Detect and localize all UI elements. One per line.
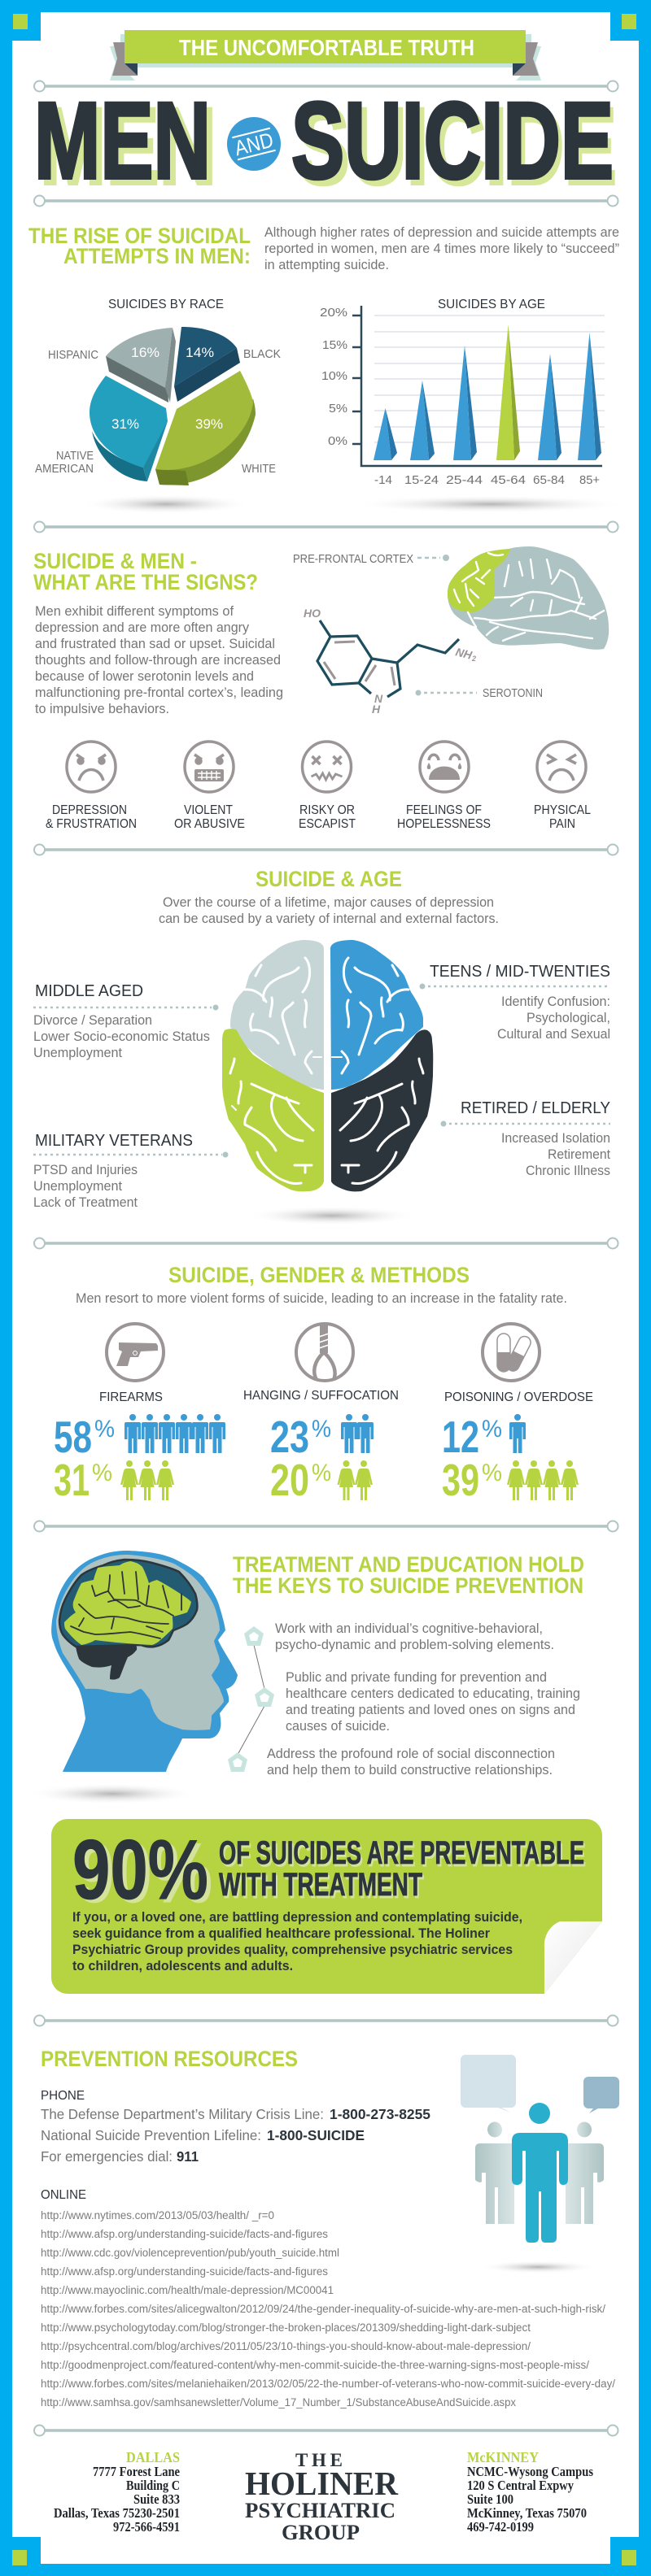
bar chart: suicides by age: 5% <box>329 402 347 416</box>
address: dallas: 7777 Forest Lane <box>93 2464 180 2479</box>
heading: suicide and age: can be caused by a variety of internal and external factors. <box>159 912 499 926</box>
heading: prevention resources: PREVENTION RESOURCES <box>41 2047 298 2071</box>
speech bubble right <box>583 2077 619 2113</box>
person left <box>475 2122 514 2224</box>
online source list: http://psychcentral.com/blog/archives/2011/05/23/10-things-you-should-know-about-male-depression/ <box>41 2340 531 2352</box>
heading: suicide and men signs: WHAT ARE THE SIGNS? <box>33 570 258 594</box>
label: military veterans: Lack of Treatment <box>33 1195 138 1210</box>
panel: firearms: 31 <box>54 1455 90 1505</box>
panel: hanging: HANGING / SUFFOCATION <box>243 1389 399 1403</box>
icon: feelings of hopelessness <box>420 742 469 792</box>
panel: hanging: 20 <box>270 1455 309 1505</box>
phone list: 1-800-SUICIDE <box>267 2127 365 2143</box>
panel: hanging <box>243 1324 399 1505</box>
icon: pills <box>483 1324 540 1381</box>
heading: the rise of suicidal attempts: THE RISE OF SUICIDAL <box>28 224 251 248</box>
bar chart: suicides by age: 25-44 <box>446 474 483 487</box>
symptom labels: DEPRESSION <box>52 803 127 817</box>
speech bubble left <box>461 2055 516 2113</box>
online source list: http://www.afsp.org/understanding-suicide/facts-and-figures <box>41 2228 328 2240</box>
bar chart: suicides by age: 10% <box>321 370 347 383</box>
signs paragraph: thoughts and follow-through are increased <box>35 653 281 668</box>
callout: 90 percent preventable: Psychiatric Group provides quality, comprehensive psychiatric services <box>72 1943 513 1957</box>
phone list: The Defense Department’s Military Crisis Line: <box>41 2106 324 2122</box>
symptom labels: ESCAPIST <box>299 817 356 831</box>
label: teens mid-twenties: TEENS / MID-TWENTIES <box>430 963 610 981</box>
label: teens mid-twenties: Cultural and Sexual <box>497 1027 610 1042</box>
treatment text: psycho-dynamic and problem-solving elements. <box>275 1638 554 1652</box>
callout: 90 percent preventable: 90% <box>76 1826 212 1921</box>
address: dallas: Building C <box>126 2478 180 2493</box>
molecule: serotonin: NH <box>454 645 474 662</box>
label: middle aged: Divorce / Separation <box>33 1013 152 1028</box>
logo: the holiner psychiatric group <box>245 2450 398 2544</box>
symptom labels: PHYSICAL <box>534 803 591 817</box>
symptom labels: HOPELESSNESS <box>397 817 491 831</box>
panel: firearms <box>54 1324 225 1505</box>
intro text: reported in women, men are 4 times more likely to “succeed” <box>264 242 619 256</box>
online source list: http://www.mayoclinic.com/health/male-depression/MC00041 <box>41 2284 334 2296</box>
panel: poisoning: 39 <box>442 1455 479 1505</box>
panel: firearms: FIREARMS <box>99 1390 163 1404</box>
signs paragraph: to impulsive behaviors. <box>35 702 169 716</box>
label: retired elderly: Retirement <box>548 1147 610 1162</box>
illustration: head with brain <box>27 1551 238 1804</box>
pie chart: suicides by race: NATIVE <box>56 450 94 463</box>
icon: risky or escapist <box>303 742 352 792</box>
heading: suicide, gender and methods: SUICIDE, GENDER & METHODS <box>168 1263 470 1287</box>
heading: suicide and age <box>159 867 499 926</box>
logo: the holiner psychiatric group: GROUP <box>282 2521 360 2544</box>
brain: cortex front <box>64 1561 191 1645</box>
online source list: http://www.nytimes.com/2013/05/03/health/ _r=0 <box>41 2209 274 2221</box>
phone list: National Suicide Prevention Lifeline: <box>41 2127 261 2143</box>
bar chart: suicides by age: 20% <box>320 307 347 320</box>
label: retired elderly: Increased Isolation <box>501 1131 610 1146</box>
callout: pre-frontal cortex: PRE-FRONTAL CORTEX <box>293 553 413 566</box>
bar chart: suicides by age: 85+ <box>579 474 600 487</box>
label: military veterans: PTSD and Injuries <box>33 1163 138 1177</box>
brain: top view quadrants <box>222 940 433 1225</box>
heading: the rise of suicidal attempts <box>28 224 251 268</box>
pie chart: suicides by race: 31% <box>111 416 139 432</box>
phone list: For emergencies dial: <box>41 2148 173 2165</box>
phone list: 911 <box>177 2148 199 2165</box>
callout: serotonin <box>415 687 543 700</box>
person right <box>566 2122 604 2224</box>
label: middle aged <box>33 982 218 1060</box>
online source list: http://www.samhsa.gov/samhsanewsletter/Volume_17_Number_1/SubstanceAbuseAndSuicide.aspx <box>41 2396 516 2408</box>
phone list <box>41 2089 430 2165</box>
signs paragraph <box>35 604 283 716</box>
heading: treatment and education: THE KEYS TO SUICIDE PREVENTION <box>233 1573 583 1598</box>
callout: 90 percent preventable: seek guidance from a qualified healthcare professional. The Holiner <box>72 1926 491 1941</box>
quadrant: middle aged <box>230 940 324 1090</box>
label: middle aged: MIDDLE AGED <box>35 982 143 1000</box>
panel: poisoning: 12 <box>442 1412 479 1462</box>
banner: the uncomfortable truth <box>110 30 541 80</box>
label: middle aged: Unemployment <box>33 1046 122 1060</box>
treatment text: Public and private funding for prevention and <box>286 1670 547 1685</box>
heading: suicide and men signs <box>33 549 258 594</box>
panel: poisoning: POISONING / OVERDOSE <box>444 1390 593 1404</box>
panel: firearms: % <box>92 1460 112 1486</box>
panel: poisoning <box>442 1324 593 1505</box>
bar chart: suicides by age: -14 <box>374 474 392 487</box>
heading: the rise of suicidal attempts: ATTEMPTS IN MEN: <box>63 244 251 268</box>
icon row: symptoms <box>46 742 591 831</box>
label: military veterans: Unemployment <box>33 1179 122 1194</box>
symptom labels: FEELINGS OF <box>406 803 482 817</box>
symptom labels: & FRUSTRATION <box>46 817 137 831</box>
person center <box>512 2103 568 2243</box>
symptom labels <box>46 803 591 831</box>
heading: treatment and education <box>233 1552 584 1598</box>
online source list: http://www.forbes.com/sites/melaniehaiken/2013/02/05/22-the-number-of-veterans-who-now-commit-suicide-every-day/ <box>41 2378 615 2390</box>
icon: noose <box>296 1324 353 1381</box>
logo: the holiner psychiatric group: THE <box>295 2450 343 2470</box>
label: teens mid-twenties: Identify Confusion: <box>501 994 610 1009</box>
online source list: http://goodmenproject.com/featured-content/why-men-commit-suicide-the-three-warning-signs-most-people-miss/ <box>41 2359 589 2371</box>
pie chart: suicides by race: 14% <box>186 345 214 360</box>
bar chart: suicides by age: 15-24 <box>404 474 439 487</box>
banner: the uncomfortable truth: THE UNCOMFORTABLE TRUTH <box>179 35 474 60</box>
address: mckinney: 120 S Central Expwy <box>467 2478 574 2493</box>
title: men and suicide: MEN <box>40 86 216 207</box>
address: dallas: Dallas, Texas 75230-2501 <box>54 2505 180 2521</box>
molecule: serotonin: 2 <box>471 655 476 663</box>
icon: violent or abusive <box>185 742 234 792</box>
bar chart: suicides by age: 15% <box>322 339 347 352</box>
callout: serotonin: SEROTONIN <box>483 687 543 700</box>
address: mckinney <box>467 2449 593 2535</box>
icon: depression and frustration <box>67 742 116 792</box>
label: retired elderly: Chronic Illness <box>526 1164 610 1178</box>
panel: hanging: % <box>312 1460 331 1486</box>
badge: and <box>227 117 281 171</box>
address: dallas: DALLAS <box>126 2449 180 2465</box>
label: military veterans: MILITARY VETERANS <box>35 1132 193 1150</box>
online source list: http://www.cdc.gov/violenceprevention/pub/youth_suicide.html <box>41 2247 339 2259</box>
quadrant: military veterans <box>222 1029 324 1191</box>
label: middle aged: Lower Socio-economic Status <box>33 1029 210 1044</box>
quadrant: retired <box>331 1029 433 1191</box>
heading: suicide, gender and methods: Men resort to more violent forms of suicide, leading to an increase in the fatality rate. <box>76 1291 567 1306</box>
brain: cortex back <box>59 1560 197 1647</box>
address: dallas: Suite 833 <box>133 2491 180 2507</box>
icon: people talking <box>461 2055 619 2274</box>
symptom labels: PAIN <box>549 817 575 831</box>
address: mckinney: NCMC-Wysong Campus <box>467 2464 593 2479</box>
bar chart: suicides by age <box>320 298 628 513</box>
online source list: http://www.afsp.org/understanding-suicide/facts-and-figures <box>41 2265 328 2278</box>
pie chart: suicides by race: 39% <box>195 416 223 432</box>
panel: hanging: % <box>312 1416 331 1442</box>
logo: the holiner psychiatric group: PSYCHIATRIC <box>245 2499 395 2522</box>
address: dallas: 972-566-4591 <box>113 2519 180 2535</box>
address: mckinney: 469-742-0199 <box>467 2519 534 2535</box>
treatment text: causes of suicide. <box>286 1719 390 1734</box>
title: men and suicide: MEN <box>34 80 211 202</box>
icon: physical pain <box>537 742 586 792</box>
label: military veterans <box>33 1132 228 1210</box>
panel: firearms: % <box>94 1416 115 1442</box>
badge: and: AND <box>232 128 276 160</box>
panel: poisoning: % <box>482 1460 502 1486</box>
online source list: http://www.forbes.com/sites/alicegwalton/2012/09/24/the-gender-inequality-of-suicide-why-are-men-at-such-high-risk/ <box>41 2303 605 2315</box>
molecule: serotonin: H <box>372 703 381 716</box>
bar chart: suicides by age: 45-64 <box>491 474 526 487</box>
pie chart: suicides by race: BLACK <box>243 348 281 361</box>
label: retired elderly <box>441 1099 610 1178</box>
treatment text: Address the profound role of social disconnection <box>267 1747 555 1761</box>
intro text: Although higher rates of depression and suicide attempts are <box>264 225 619 240</box>
signs paragraph: depression and are more often angry <box>35 620 250 635</box>
heading: suicide and age: Over the course of a lifetime, major causes of depression <box>163 895 494 910</box>
brain: cerebellum <box>76 1645 137 1680</box>
logo: the holiner psychiatric group: HOLINER <box>245 2465 398 2502</box>
treatment text: Work with an individual’s cognitive-behavioral, <box>275 1621 543 1636</box>
panel: poisoning: % <box>482 1416 502 1442</box>
bar chart: suicides by age: 0% <box>328 435 347 448</box>
symptom labels: VIOLENT <box>184 803 233 817</box>
brain: side view <box>448 546 609 650</box>
address: mckinney: Suite 100 <box>467 2491 513 2507</box>
address: mckinney: McKINNEY <box>467 2449 539 2465</box>
quadrant: teens <box>330 940 423 1090</box>
phone list: 1-800-273-8255 <box>330 2106 430 2122</box>
heading: suicide, gender and methods <box>76 1263 567 1306</box>
panel: firearms: 58 <box>54 1412 92 1462</box>
callout: 90 percent preventable: WITH TREATMENT <box>221 1869 424 1905</box>
address: mckinney: McKinney, Texas 75070 <box>467 2505 587 2521</box>
callout: 90 percent preventable: 90% <box>72 1823 208 1917</box>
callout: 90 percent preventable: WITH TREATMENT <box>219 1867 422 1903</box>
phone list: PHONE <box>41 2089 85 2103</box>
heading: suicide and men signs: SUICIDE & MEN - <box>33 549 197 573</box>
online source list: ONLINE <box>41 2188 86 2202</box>
label: teens mid-twenties <box>420 963 610 1042</box>
pie chart: suicides by race <box>35 298 281 514</box>
treatment text: healthcare centers dedicated to educating, training <box>286 1686 580 1701</box>
bar chart: suicides by age: SUICIDES BY AGE <box>438 298 545 311</box>
callout: 90 percent preventable <box>51 1819 602 1994</box>
callout: 90 percent preventable: If you, or a loved one, are battling depression and contemplating suicide, <box>72 1910 522 1925</box>
intro text: in attempting suicide. <box>264 258 389 272</box>
pie chart: suicides by race: AMERICAN <box>35 463 94 476</box>
online source list: http://www.psychologytoday.com/blog/stronger-the-broken-places/201309/shedding-light-dark-subject <box>41 2321 531 2334</box>
symptom labels: RISKY OR <box>299 803 355 817</box>
treatment text <box>267 1621 580 1778</box>
signs paragraph: malfunctioning pre-frontal cortex’s, leading <box>35 685 283 700</box>
label: teens mid-twenties: Psychological, <box>526 1011 610 1025</box>
slice: black <box>174 327 240 402</box>
pie chart: suicides by race: HISPANIC <box>48 349 98 362</box>
address: dallas <box>54 2449 180 2535</box>
slice: white <box>155 371 256 485</box>
heading: suicide and age: SUICIDE & AGE <box>256 867 402 891</box>
treatment text: and help them to build constructive relationships. <box>267 1763 553 1778</box>
bar chart: suicides by age: 65-84 <box>533 474 565 487</box>
page curl <box>544 1921 602 1994</box>
pie chart: suicides by race: WHITE <box>242 463 276 476</box>
panel: hanging: 23 <box>270 1412 309 1462</box>
title: men and suicide <box>34 80 617 207</box>
slice: native american <box>90 376 168 481</box>
treatment text: and treating patients and loved ones on signs and <box>286 1703 575 1717</box>
signs paragraph: and frustrated than sad or upset. Suicidal <box>35 637 275 651</box>
signs paragraph: Men exhibit different symptoms of <box>35 604 234 619</box>
connector with pentagon bullets <box>228 1626 274 1772</box>
online source list <box>41 2188 615 2408</box>
bars <box>374 324 601 460</box>
pie chart: suicides by race: SUICIDES BY RACE <box>108 298 224 311</box>
molecule: serotonin: N <box>374 692 383 705</box>
symptom labels: OR ABUSIVE <box>174 817 245 831</box>
label: retired elderly: RETIRED / ELDERLY <box>461 1099 610 1117</box>
heading: treatment and education: TREATMENT AND EDUCATION HOLD <box>233 1552 584 1577</box>
callout: 90 percent preventable: to children, adolescents and adults. <box>72 1959 293 1973</box>
intro text <box>264 225 619 272</box>
icon: gun <box>107 1324 164 1381</box>
slice: hispanic <box>106 328 176 402</box>
molecule: serotonin <box>304 607 543 716</box>
molecule: serotonin: HO <box>304 607 321 620</box>
pie chart: suicides by race: 16% <box>131 345 159 360</box>
signs paragraph: because of lower serotonin levels and <box>35 669 254 684</box>
